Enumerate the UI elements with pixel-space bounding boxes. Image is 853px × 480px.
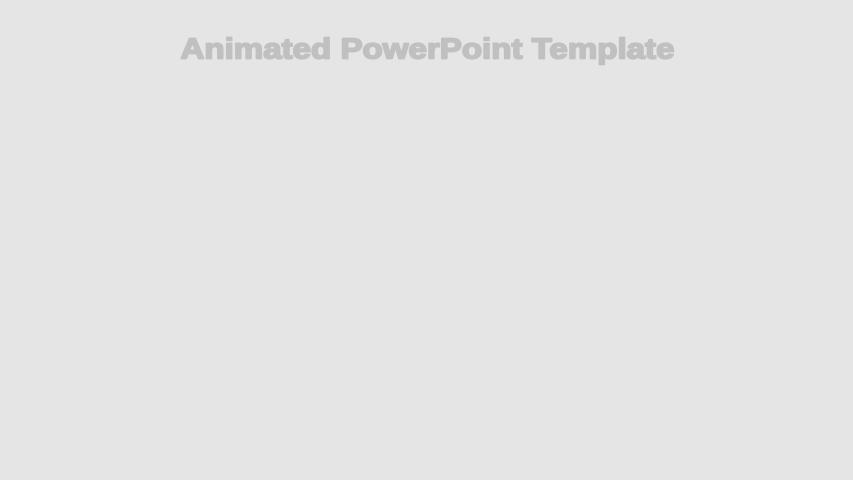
title: Animated PowerPoint Template: [180, 34, 674, 66]
